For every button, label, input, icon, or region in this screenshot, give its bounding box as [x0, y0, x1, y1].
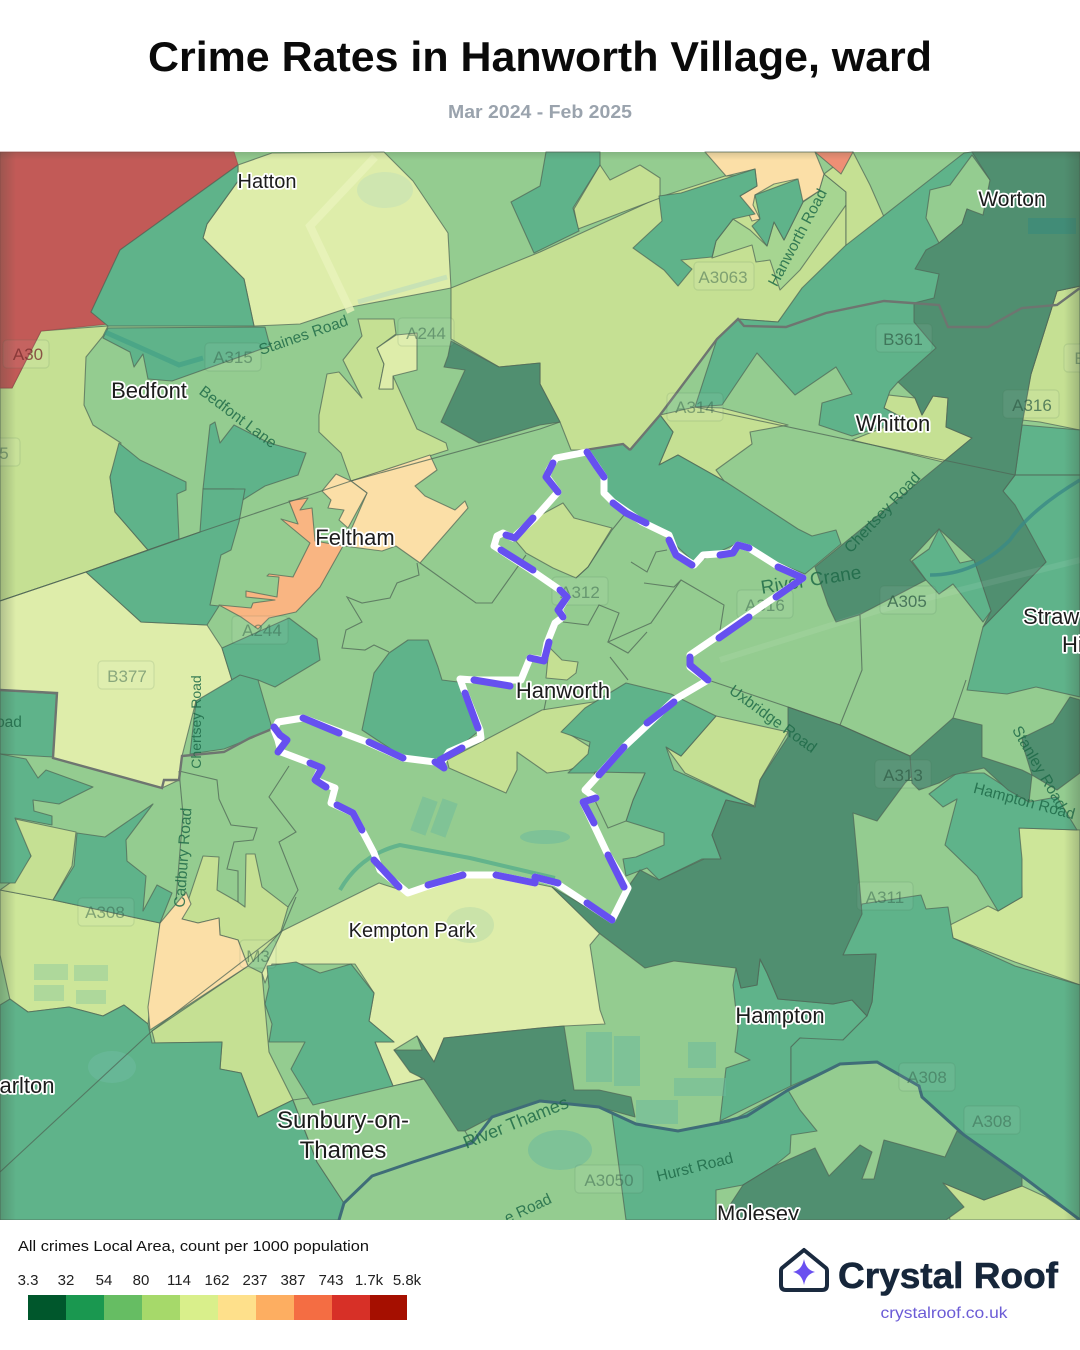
- road number shields: B377: [107, 667, 147, 686]
- legend heading: All crimes Local Area, count per 1000 population: [18, 1238, 369, 1255]
- place name labels: Thames: [300, 1137, 386, 1164]
- place name labels: Worton: [978, 188, 1046, 211]
- road and river names: Hampton Road: [972, 780, 1077, 823]
- place name labels: arlton: [0, 1073, 55, 1098]
- legend scale values: 54: [96, 1272, 112, 1289]
- road number shields: A315: [213, 348, 253, 367]
- road number shields: A308: [907, 1068, 947, 1087]
- road number shields: A308: [85, 903, 125, 922]
- road and river names: Bedfont Lane: [196, 383, 280, 452]
- place name labels: [0, 171, 1080, 1226]
- road and river names: Hanworth Road: [765, 186, 831, 289]
- legend scale values: 32: [58, 1272, 74, 1289]
- road and river names: e Road: [502, 1191, 554, 1227]
- legend scale values: 5.8k: [393, 1272, 422, 1289]
- road number shields: A312: [560, 583, 600, 602]
- place name labels: Bedfont: [111, 378, 187, 403]
- road and river names: Hurst Road: [655, 1150, 735, 1185]
- road number shields: A244: [242, 621, 282, 640]
- road number shields: A244: [406, 324, 446, 343]
- road and river names: Uxbridge Road: [726, 682, 819, 757]
- road number shields: A314: [675, 398, 715, 417]
- road number shields: A3050: [584, 1171, 634, 1190]
- road number shields: A313: [883, 766, 923, 785]
- legend scale values: 80: [133, 1272, 149, 1289]
- map regions: lowest crime dark green areas: [394, 152, 1080, 1220]
- boundary lines and rivers: [0, 288, 1080, 1220]
- footer background: [0, 1220, 1080, 1350]
- legend scale values: 237: [242, 1272, 268, 1289]
- place name labels: Molesey: [717, 1201, 799, 1226]
- map regions: lower crime light areas: [0, 152, 1080, 1220]
- road and river names: Chertsey Road: [188, 675, 204, 769]
- legend scale values: 1.7k: [355, 1272, 384, 1289]
- map regions: medium-low crime green areas: [0, 152, 1080, 1220]
- road and river names: Chertsey Road: [841, 469, 924, 557]
- road number shields: A316: [1012, 396, 1052, 415]
- road number shields: [0, 262, 1080, 1193]
- place name labels: Kempton Park: [349, 920, 476, 942]
- place name labels: Hanworth: [516, 678, 610, 703]
- road and river names: [0, 186, 1077, 1227]
- legend colour bar: [28, 1295, 407, 1320]
- icon: house with star: [781, 1250, 827, 1290]
- legend scale values: 743: [318, 1272, 344, 1289]
- legend scale values: 387: [280, 1272, 306, 1289]
- place name labels: Straw: [1023, 604, 1079, 629]
- road number shields: A305: [887, 592, 927, 611]
- road and river names: River Crane: [759, 562, 863, 599]
- place name labels: Sunbury-on-: [277, 1107, 409, 1134]
- legend scale values: 3.3: [18, 1272, 38, 1289]
- place name labels: Hampton: [735, 1003, 825, 1028]
- road number shields: A311: [866, 888, 904, 907]
- logo: Crystal Roof: [781, 1250, 1059, 1322]
- logo wordmark: Crystal Roof: [838, 1255, 1059, 1296]
- road and river names: River Thames: [460, 1092, 571, 1153]
- road number shields: A308: [972, 1112, 1012, 1131]
- water, reservoirs and parks: [34, 157, 1080, 1170]
- edge vignette shading: [0, 152, 1080, 1220]
- legend scale values: 114: [167, 1272, 191, 1289]
- logo url: crystalroof.co.uk: [880, 1305, 1009, 1322]
- place name labels: Hatton: [238, 171, 296, 193]
- road number shields: M3: [246, 947, 270, 966]
- ward boundary: purple dashes: [274, 452, 803, 920]
- road number shields: A3063: [698, 268, 748, 287]
- map regions: hotspot peach, orange and red areas: [0, 152, 853, 1030]
- legend: [18, 1238, 422, 1320]
- road number shields: A30: [13, 345, 43, 364]
- place name labels: Whitton: [856, 411, 930, 436]
- legend scale values: [18, 1272, 422, 1289]
- road number shields: B361: [883, 330, 923, 349]
- legend scale values: 162: [204, 1272, 230, 1289]
- ward boundary: Hanworth Village dashed outline: [274, 452, 803, 920]
- road and river names: Stanley Road: [1008, 723, 1070, 812]
- panel: choropleth map: [0, 152, 1080, 1227]
- road and river names: Staines Road: [257, 313, 350, 359]
- title: Crime Rates in Hanworth Village, ward: [148, 33, 932, 80]
- road number shields: A316: [745, 596, 785, 615]
- road and river names: Cadbury Road: [172, 807, 195, 908]
- place name labels: Feltham: [315, 525, 395, 550]
- subtitle: date range: Mar 2024 - Feb 2025: [448, 102, 632, 122]
